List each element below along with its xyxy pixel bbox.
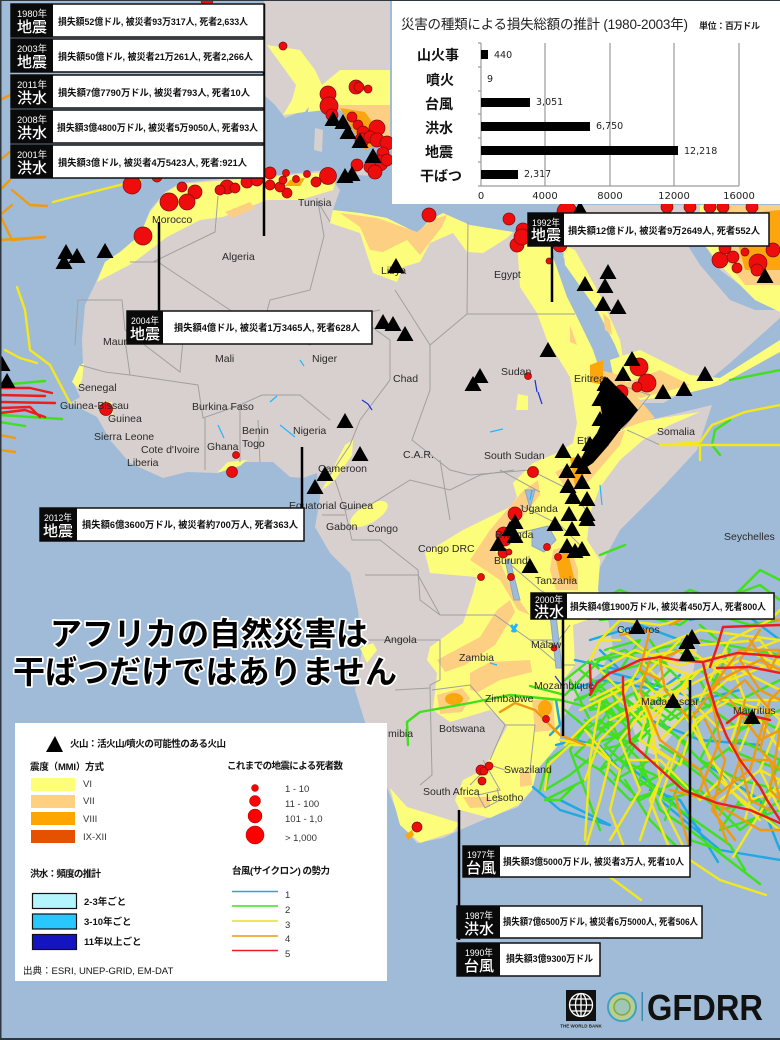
map: country labels: Zimbabwe [485, 693, 534, 705]
map: country labels: Cote d'Ivoire [141, 444, 200, 456]
legend: earthquake deaths: 11 - 100 [285, 799, 319, 810]
callout: 2011 flood: 洪水 [17, 90, 47, 107]
map: country labels: Mozambique [534, 680, 594, 692]
callout: 1977 cyclone: 台風 [466, 860, 496, 877]
map: country labels: Mauritius [733, 705, 776, 717]
callout: 2008 flood: 洪水 [17, 125, 47, 142]
map: country labels: Maur [103, 336, 127, 348]
logo: GFDRR [608, 987, 763, 1028]
map: country labels: Ghana [207, 441, 239, 453]
map: country labels: Niger [312, 353, 338, 365]
chart axis labels: 16000 [723, 191, 755, 202]
logo: GFDRR: GFDRR [647, 987, 763, 1028]
map: volcano triangles [0, 111, 774, 724]
legend: earthquake deaths: これまでの地震による死者数 [227, 760, 343, 772]
chart value labels: 12,218 [684, 146, 717, 157]
legend: source: 出典：ESRI, UNEP-GRID, EM-DAT [23, 965, 173, 977]
legend: flood frequency: 洪水：頻度の推計 [30, 868, 101, 880]
legend: cyclone intensity: 3 [285, 920, 290, 931]
callout: 2012 earthquake: 地震 [43, 523, 73, 540]
legend: volcano: 火山：活火山/噴火の可能性のある火山 [70, 738, 226, 750]
panel: legend [15, 723, 387, 981]
callout: 2004 earthquake: 損失額4億ドル, 被災者1万3465人, 死者628人 [174, 322, 360, 334]
legend: cyclone intensity [232, 865, 330, 960]
cyclone category 2 tracks [0, 370, 780, 884]
map: country labels [60, 197, 776, 804]
chart category labels: 台風 [425, 96, 453, 112]
callout: 2004 earthquake: 2004年 [131, 315, 159, 327]
chart gridlines and axis [478, 43, 739, 186]
callout: 1987 flood: 洪水 [464, 921, 494, 938]
map: country labels: Sierra Leone [94, 431, 154, 443]
callout: 1990 cyclone: 1990年 [465, 947, 493, 959]
map: country labels: Malawi [531, 639, 564, 651]
legend: shaking intensity [30, 761, 107, 843]
cyclone category 1 tracks [533, 610, 780, 862]
cyclone category 5 tracks [0, 388, 780, 823]
callout: 1992 earthquake [528, 213, 769, 246]
callout: 2011 flood [11, 75, 264, 108]
callout: 1980 earthquake: 地震 [17, 19, 47, 36]
map: lakes [505, 490, 562, 668]
chart category labels [417, 47, 462, 184]
title: アフリカの自然災害は [50, 616, 368, 652]
map: country labels: Guinea-Bissau [60, 400, 129, 412]
callout: 2001 flood: 洪水 [17, 160, 47, 177]
map: country labels: Mali [215, 353, 234, 365]
persian gulf [683, 236, 780, 310]
legend: earthquake deaths: 1 - 10 [285, 784, 309, 795]
legend: flood frequency: 3-10年ごと [84, 916, 132, 928]
callout: 1987 flood [457, 906, 702, 938]
map: country labels: South Africa [423, 786, 480, 798]
callout: 2003 earthquake: 地震 [17, 54, 47, 71]
map: flood zones [218, 360, 602, 688]
map: country labels: Angola [384, 634, 417, 646]
map: country labels: Burkina Faso [192, 401, 254, 413]
map: country labels: Guinea [108, 413, 142, 425]
map: country labels: Chad [393, 373, 418, 385]
callout: 1977 cyclone: 1977年 [467, 849, 495, 861]
logo: World Bank: THE WORLD BANK [560, 1024, 602, 1028]
callout: 1980 earthquake: 1980年 [17, 8, 47, 20]
callout: 2000 flood: 洪水 [534, 604, 564, 621]
map: country labels: Madagascar [641, 696, 699, 708]
chart value labels [487, 50, 717, 180]
callout: 1990 cyclone [457, 943, 600, 976]
callout: 2001 flood: 2001年 [17, 149, 47, 161]
map: country labels: Cameroon [318, 463, 367, 475]
map: country labels: Gabon [326, 521, 358, 533]
map: country labels: South Sudan [484, 450, 545, 462]
legend: cyclone intensity: 4 [285, 934, 290, 945]
callout: 2011 flood: 2011年 [17, 79, 47, 91]
chart value labels: 440 [494, 50, 512, 61]
chart value labels: 9 [487, 74, 493, 85]
map: country labels: Lesotho [486, 792, 524, 804]
callout: 2000 flood [531, 593, 774, 621]
map: country labels: Egypt [494, 269, 521, 281]
callout: 2012 earthquake: 損失額6億3600万ドル, 被災者約700万人, 死者363人 [82, 519, 298, 531]
map: country labels: Togo [242, 438, 265, 450]
legend: flood frequency: 11年以上ごと [84, 936, 142, 948]
callout: 2003 earthquake: 損失額50億ドル, 被災者21万261人, 死者2,266人 [58, 51, 253, 63]
map: country labels: Tanzania [535, 575, 577, 587]
map: country labels: Equatorial Guinea [289, 500, 373, 512]
callout: 1987 flood: 1987年 [465, 910, 493, 922]
map: country labels: Libya [381, 265, 406, 277]
callout: 1992 earthquake: 地震 [531, 227, 561, 244]
legend: cyclone intensity: 5 [285, 949, 290, 960]
map: country labels: Tunisia [298, 197, 332, 209]
callout: 2000 flood: 損失額4億1900万ドル, 被災者450万人, 死者800人 [570, 601, 766, 613]
map: country labels: Liberia [127, 457, 159, 469]
cyclone category 3 tracks [5, 180, 780, 900]
chart category labels: 地震 [425, 144, 453, 160]
legend: cyclone intensity: 1 [285, 890, 290, 901]
map: country labels: Rwanda [495, 529, 534, 541]
map: country labels: Zambia [459, 652, 494, 664]
callout: 1990 cyclone: 台風 [464, 958, 494, 975]
map: earthquake intensity VII zones [225, 105, 780, 808]
callout: 1980 earthquake [11, 4, 264, 37]
chart axis labels: 12000 [658, 191, 690, 202]
callout: 2000 flood: 2000年 [535, 594, 563, 606]
callout: 1990 cyclone: 損失額3億9300万ドル [506, 953, 593, 965]
legend: flood frequency: 2-3年ごと [84, 896, 126, 908]
legend: shaking intensity: VII [83, 796, 95, 807]
map: country labels: C.A.R. [403, 449, 434, 461]
legend: earthquake deaths [227, 760, 343, 844]
callout: 2012 earthquake [40, 508, 304, 541]
map: country labels: Comoros [617, 624, 660, 636]
legend: earthquake deaths: 101 - 1,0 [285, 814, 322, 825]
chart axis labels: 8000 [597, 191, 623, 202]
map: earthquake death circles [100, 0, 780, 832]
legend: shaking intensity: VIII [83, 814, 97, 825]
map: country labels: Botswana [439, 723, 485, 735]
callout leader lines [159, 4, 690, 940]
map: country labels: Benin [242, 425, 269, 437]
map: country borders [75, 196, 683, 808]
map: country labels: Congo DRC [418, 543, 475, 555]
callout: 2001 flood [11, 145, 264, 178]
panel: damage bar chart [392, 0, 780, 204]
map: Ethiopian rift volcano band [577, 377, 638, 467]
legend: flood frequency [30, 868, 142, 950]
map: country labels: Somalia [657, 426, 695, 438]
map: country labels: Eritrea [574, 373, 605, 385]
map: country labels: Burundi [494, 555, 530, 567]
callout: 1977 cyclone: 損失額3億5000万ドル, 被災者3万人, 死者10人 [503, 856, 684, 868]
legend: shaking intensity: 震度（MMI）方式 [30, 761, 104, 773]
chart axis labels [478, 191, 755, 202]
map: country labels: Seychelles [724, 531, 775, 543]
map: country labels: Eth [577, 435, 593, 447]
chart value labels: 3,051 [536, 97, 563, 108]
chart category labels: 洪水 [425, 120, 453, 136]
callout: 2004 earthquake [127, 311, 372, 344]
legend: cyclone intensity: 台風(サイクロン) の勢力 [232, 865, 330, 877]
legend: earthquake deaths: > 1,000 [285, 833, 317, 844]
callout: 2008 flood [11, 110, 264, 143]
callout: 2008 flood: 損失額3億4800万ドル, 被災者5万9050人, 死者93人 [57, 122, 258, 134]
map: country labels: Algeria [222, 251, 255, 263]
callout: 1980 earthquake: 損失額52億ドル, 被災者93万317人, 死者2,633人 [58, 16, 248, 28]
map: cyclone tracks [0, 95, 780, 900]
chart category labels: 干ばつ [420, 168, 462, 184]
map: land masses [70, 0, 780, 843]
chart category labels: 噴火 [426, 72, 454, 88]
legend: volcano [46, 736, 226, 752]
map: country labels: Nigeria [293, 425, 326, 437]
legend: shaking intensity: VI [83, 779, 92, 790]
cyclone category 4 tracks [0, 95, 780, 850]
map: earthquake intensity VI zones [72, 45, 780, 843]
legend: shaking intensity: IX-XII [83, 832, 107, 843]
callout: 1992 earthquake: 損失額12億ドル, 被災者9万2649人, 死者552人 [568, 225, 760, 237]
map: country labels: Morocco [152, 214, 192, 226]
chart value labels: 2,317 [524, 169, 551, 180]
map: country labels: Senegal [78, 382, 117, 394]
map: country labels: Congo [367, 523, 398, 535]
chart value labels: 6,750 [596, 121, 623, 132]
title [13, 616, 397, 690]
callout: 1987 flood: 損失額7億6500万ドル, 被災者6万5000人, 死者506人 [503, 916, 698, 928]
chart category labels: 山火事 [417, 47, 459, 63]
chart axis labels: 4000 [532, 191, 558, 202]
callout: 2011 flood: 損失額7億7790万ドル, 被災者793人, 死者10人 [58, 87, 250, 99]
map: country labels: Uganda [521, 503, 558, 515]
callout: 1992 earthquake: 1992年 [532, 217, 560, 229]
callout: 2004 earthquake: 地震 [130, 326, 160, 343]
callout: 2003 earthquake [11, 39, 264, 72]
chart bars [481, 50, 678, 179]
chart title: 災害の種類による損失総額の推計 (1980-2003年) [401, 17, 688, 32]
callout: 2001 flood: 損失額3億ドル, 被災者4万5423人, 死者:921人 [58, 157, 247, 169]
legend: cyclone intensity: 2 [285, 905, 290, 916]
chart axis labels: 0 [478, 191, 484, 202]
map: country labels: Swaziland [504, 764, 552, 776]
chart unit: 単位：百万ドル [699, 20, 760, 31]
map: country labels: Sudan [501, 366, 532, 378]
callout: 2008 flood: 2008年 [17, 114, 47, 126]
callout: 2003 earthquake: 2003年 [17, 43, 47, 55]
title: 干ばつだけではありません [13, 654, 397, 690]
map: country labels: mibia [388, 728, 413, 740]
callout: 1977 cyclone [463, 846, 690, 877]
callout: 2012 earthquake: 2012年 [44, 512, 72, 524]
logo: World Bank [560, 990, 602, 1028]
map: earthquake intensity VIII zones [285, 108, 780, 840]
